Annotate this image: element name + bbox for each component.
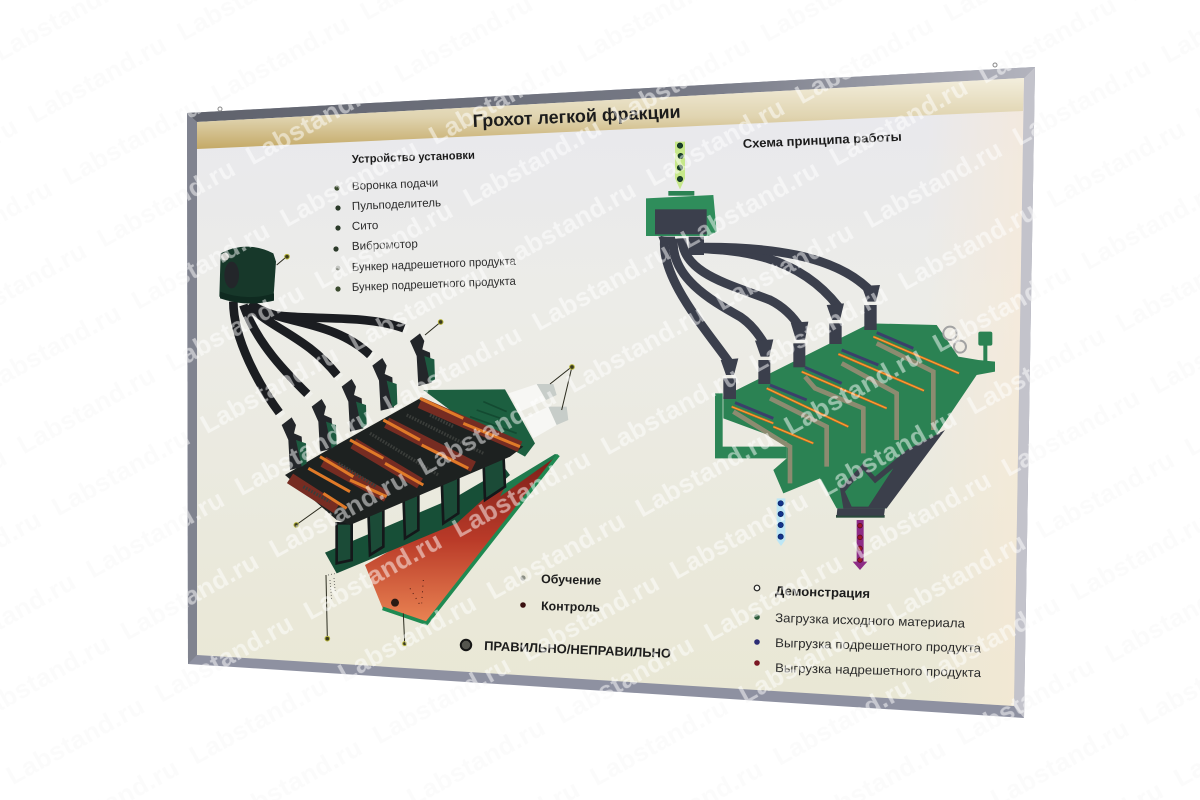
legend: demonstration: Выгрузка подрешетного продукта [775,636,981,655]
list of components: Воронка подачи [352,176,438,193]
legend: demonstration [754,583,981,680]
callout pointers [277,257,572,643]
heading: operating principle: Схема принципа работы [743,130,902,151]
diagram: 3D screen assembly [219,247,574,646]
list of components: Бункер надрешетного продукта [352,255,517,274]
panel: board frame [187,63,1035,718]
panel: board surface [197,78,1024,706]
title: Грохот легкой фракции [472,102,681,131]
funnel bunker [365,454,558,623]
list of components: Бункер подрешетного продукта [352,275,517,294]
legend: learning modes: Контроль [541,599,601,615]
arrow: material feed [675,142,685,189]
panel: device components list [333,150,517,294]
arrow: oversize discharge [853,520,867,570]
lower support beam [325,468,510,573]
white pipe collars [279,328,407,416]
green side wall [423,389,535,457]
distributor box [646,191,717,255]
screen decks [732,333,959,443]
feed pipes [233,302,404,413]
vibro unit [978,332,992,362]
heading: device: Устройство установки [352,150,475,166]
feed hopper [219,247,276,304]
legend: learning modes [520,572,601,615]
correct/incorrect indicator: ПРАВИЛЬНО/НЕПРАВИЛЬНО [484,638,671,661]
legend: demonstration: Демонстрация [775,583,870,601]
list of components: Сито [352,219,379,233]
distribution chutes [282,333,435,470]
motor rings [943,327,966,353]
vibromotors [508,384,568,438]
legend: learning modes: Обучение [541,572,601,588]
legend: demonstration: Загрузка исходного материала [775,611,965,631]
callout dots [285,254,574,646]
dark hopper lining [840,430,945,508]
board watermark [187,67,1035,718]
chutes [721,285,880,399]
list of components [333,176,517,294]
debris stream [328,573,337,600]
feed pipes [664,237,873,365]
product flow strips [733,343,933,483]
discharge base [836,515,885,518]
list of components: Пульподелитель [352,196,441,213]
diagram: principle schematic [646,142,995,570]
support legs [337,453,505,563]
left support frame [715,393,787,458]
legend: demonstration: Выгрузка надрешетного продукта [775,661,981,680]
screen deck [285,398,523,525]
machine body [723,323,995,508]
list of components: Вибромотор [352,237,418,253]
arrow: undersize discharge [777,498,785,546]
